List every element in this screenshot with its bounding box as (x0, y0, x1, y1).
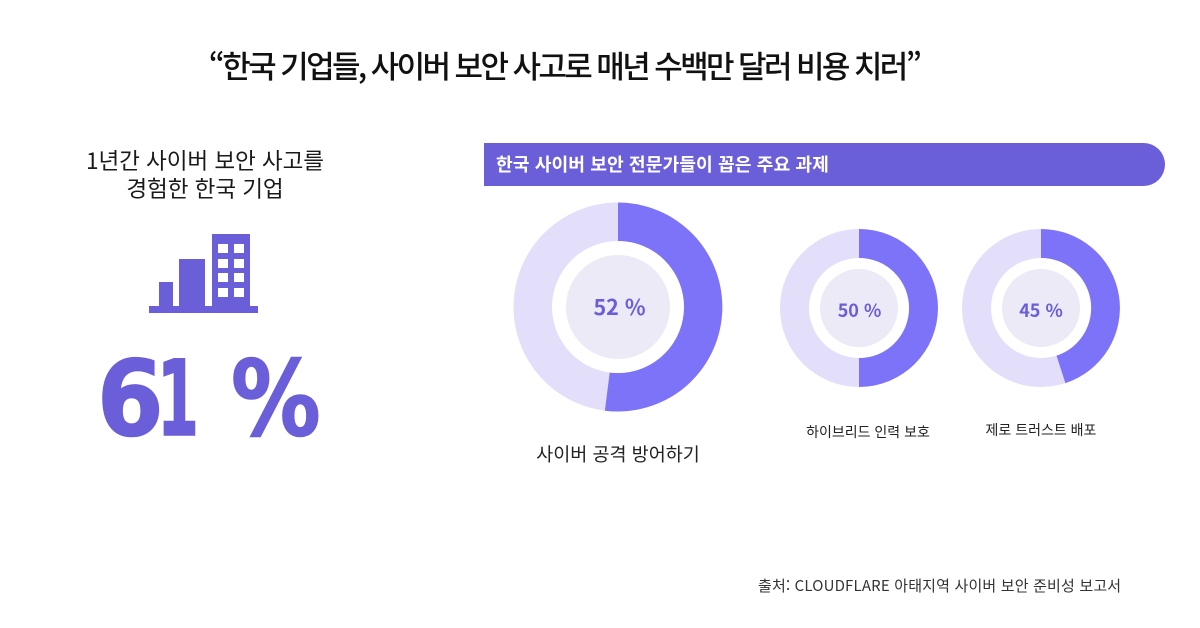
big number: 61 percent: 1 (157, 340, 199, 461)
text: left panel heading: 1년간 사이버 보안 사고를 (86, 143, 324, 176)
text: left panel heading: 경험한 한국 기업 (126, 171, 284, 204)
section header bar (484, 143, 1165, 186)
text: left panel heading (86, 143, 324, 204)
section header text: 한국 사이버 보안 전문가들이 꼽은 주요 과제 (496, 151, 829, 177)
big number: 61 percent: % (231, 338, 321, 460)
donut chart: 45 percent: 45 % (1019, 297, 1063, 323)
donut chart: 52 percent: 52 % (593, 291, 646, 322)
donut chart: 50 percent: 50 % (838, 297, 881, 323)
big number: 61 percent: 6 (97, 338, 164, 460)
source note: 출처: CLOUDFLARE 아태지역 사이버 보안 준비성 보고서 (758, 575, 1121, 596)
label: cyber attack defense: 사이버 공격 방어하기 (536, 441, 700, 467)
title: “한국 기업들, 사이버 보안 사고로 매년 수백만 달러 비용 치러” (209, 42, 919, 87)
label: zero trust deployment: 제로 트러스트 배포 (986, 420, 1096, 440)
label: hybrid workforce protection: 하이브리드 인력 보호 (806, 422, 930, 442)
